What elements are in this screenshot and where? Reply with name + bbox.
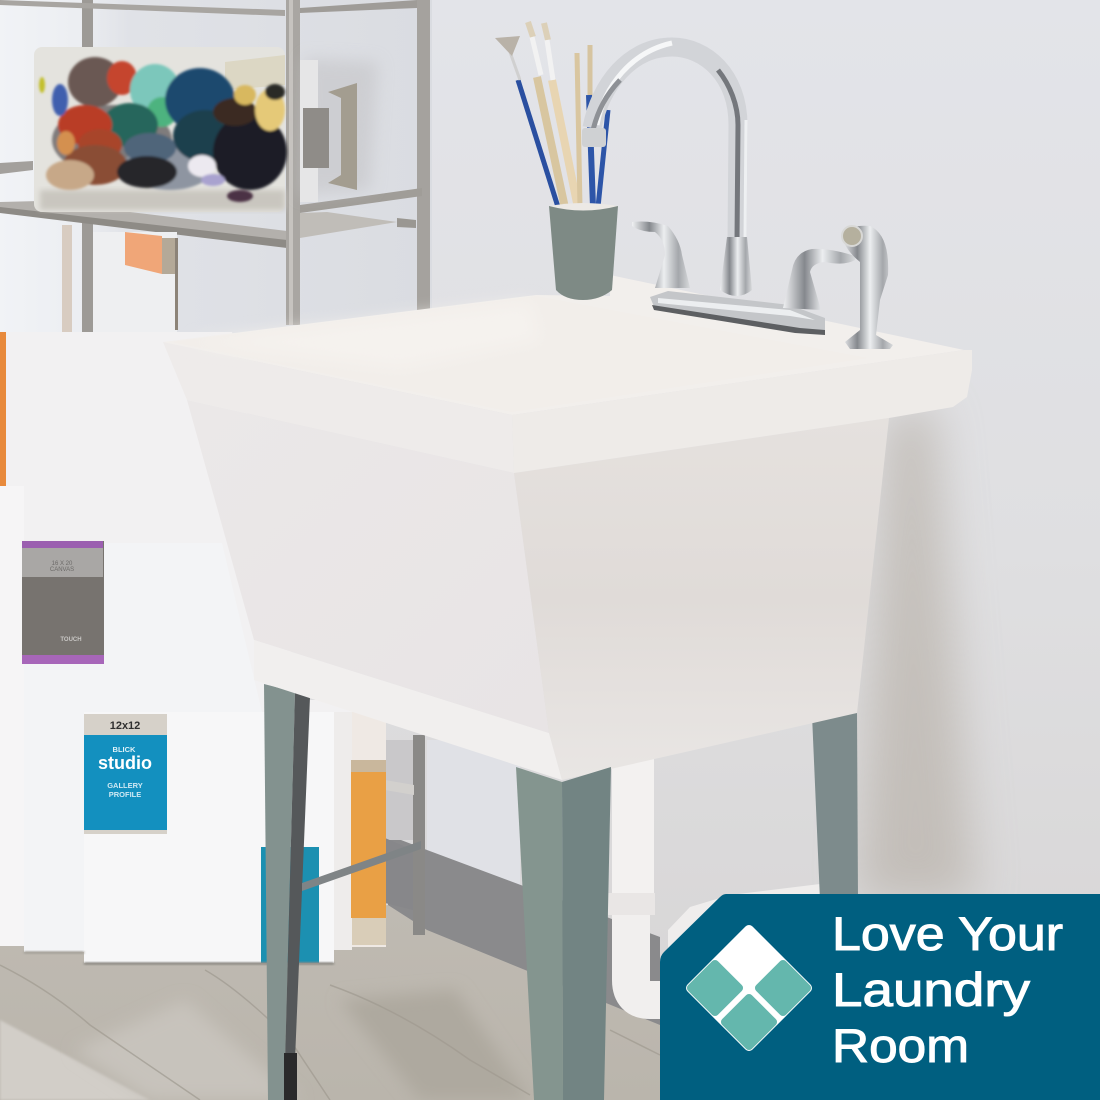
badge panel bbox=[660, 894, 1100, 1100]
heading text: Room bbox=[832, 1020, 969, 1073]
drain pipe bbox=[608, 758, 820, 1000]
canvas label: 16x20 canvas: CANVAS bbox=[50, 567, 74, 573]
logo diamond bbox=[684, 923, 814, 1053]
canvas label: Blick studio: 12x12 bbox=[110, 720, 140, 732]
canvas label: Blick studio: GALLERY bbox=[107, 781, 143, 790]
right sink leg bbox=[812, 712, 858, 900]
baseboard bbox=[388, 835, 660, 1028]
front sink leg bbox=[516, 767, 611, 1100]
paintbrushes bbox=[495, 22, 608, 208]
canvas label: Blick studio: PROFILE bbox=[109, 790, 141, 799]
canvas label: Blick studio: BLICK bbox=[113, 745, 136, 754]
rim front face left bbox=[163, 342, 514, 473]
left handle bbox=[632, 222, 690, 288]
heading text: Laundry bbox=[832, 964, 1030, 1017]
stack of canvases bbox=[0, 332, 386, 965]
canvas label: 16x20 canvas bbox=[22, 541, 104, 664]
basin interior bbox=[172, 296, 868, 412]
faucet bbox=[582, 43, 893, 349]
heading text bbox=[832, 908, 1063, 1073]
faucet neck bbox=[720, 237, 752, 296]
shelving unit bbox=[0, 0, 430, 332]
sink body right face bbox=[514, 418, 889, 780]
sink deck and rim bbox=[163, 275, 964, 415]
canvas label: 16x20 canvas: 16 X 20 bbox=[52, 561, 73, 567]
wood floor bbox=[0, 905, 660, 1100]
sink body left face bbox=[187, 400, 549, 733]
canvas label: 16x20 canvas: TOUCH bbox=[60, 637, 82, 643]
canvas label: Blick studio: studio bbox=[98, 753, 152, 773]
right handle bbox=[783, 249, 855, 310]
shelf rear leg and rod bbox=[385, 735, 425, 935]
faucet spout bbox=[592, 47, 738, 245]
orange card behind shelf bbox=[93, 232, 178, 332]
left sink leg bbox=[264, 684, 310, 1100]
cup bbox=[549, 203, 618, 300]
heading text: Love Your bbox=[832, 908, 1063, 961]
cross rod bbox=[302, 841, 421, 891]
paint palette bbox=[34, 47, 378, 212]
faucet deck plate bbox=[650, 291, 825, 334]
rim front face right bbox=[512, 350, 972, 473]
laundry sink bbox=[163, 275, 972, 780]
canvas label: Blick studio bbox=[84, 714, 167, 834]
lower band of sink bbox=[254, 640, 562, 780]
side sprayer bbox=[842, 226, 893, 349]
